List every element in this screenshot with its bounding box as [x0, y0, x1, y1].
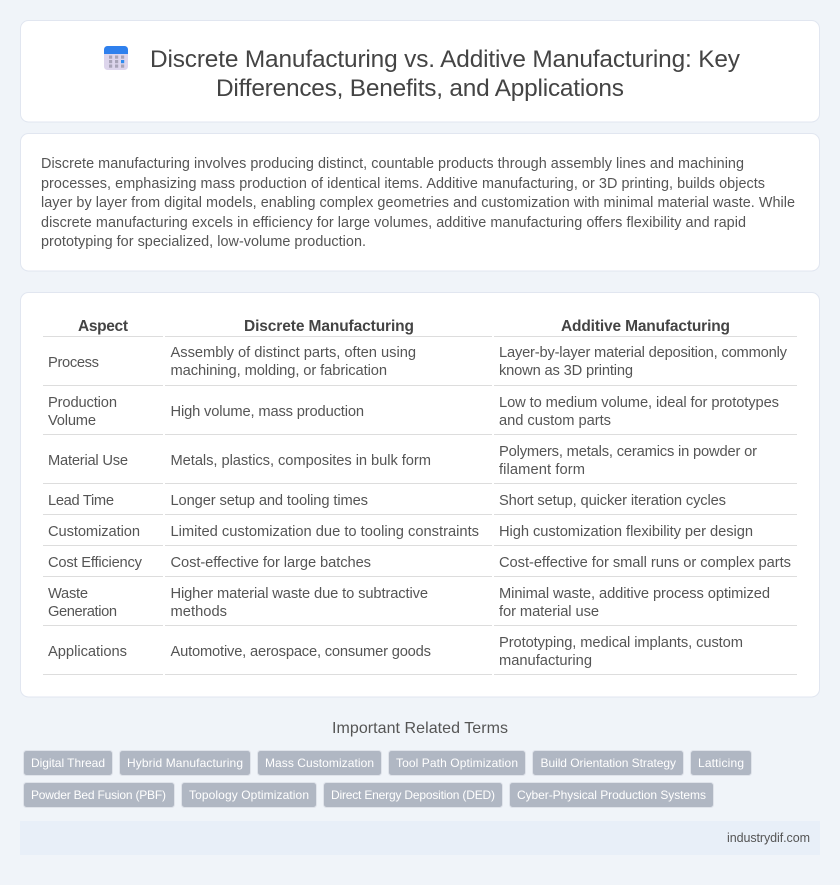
table row: material use: Polymers, metals, ceramics in powder or — [499, 444, 757, 460]
table header row: Aspect — [78, 318, 128, 335]
tag: hybrid manufacturing — [120, 750, 250, 776]
tag: mass customization: Mass Customization — [265, 756, 374, 770]
table row: cost efficiency: Cost-effective for small runs or complex parts — [499, 555, 791, 571]
table row: material use: Material Use — [48, 453, 128, 469]
table row: waste generation: Higher material waste due to subtractive — [170, 586, 428, 602]
table row: process: Process — [48, 355, 99, 371]
tag: powder bed fusion: Powder Bed Fusion (PBF) — [31, 788, 166, 802]
text block: introduction paragraph: prototyping for specialized, low-volume production. — [41, 234, 366, 250]
tag: digital thread — [24, 750, 112, 776]
table row: material use: filament form — [499, 462, 585, 478]
table row: material use — [43, 444, 797, 484]
tag: powder bed fusion — [24, 782, 174, 808]
panel: related term tags — [24, 750, 752, 808]
footer — [20, 821, 820, 855]
tag: mass customization — [258, 750, 382, 776]
table row: process: known as 3D printing — [499, 363, 633, 379]
table row: cost efficiency: Cost-effective for large batches — [170, 555, 371, 571]
text block: introduction paragraph: processes, emphasizing mass production of identical items. Additive manufacturing, or 3D printing, builds objects — [41, 176, 765, 192]
table row: cost efficiency: Cost Efficiency — [48, 555, 143, 571]
table row: applications: manufacturing — [499, 653, 592, 669]
tag: cyber-physical production systems — [510, 782, 714, 808]
table header row: Discrete Manufacturing — [244, 318, 414, 335]
table row: process — [43, 345, 797, 386]
panel: introduction — [20, 134, 820, 271]
text block: introduction paragraph: Discrete manufacturing involves producing distinct, countable products through assembly lines and machining — [41, 156, 744, 172]
table row: waste generation: Generation — [48, 604, 117, 620]
table row: applications: Applications — [48, 644, 127, 660]
text block: introduction paragraph — [41, 156, 795, 250]
table row: production volume: High volume, mass production — [170, 404, 364, 420]
table row: waste generation: methods — [170, 604, 227, 620]
tag: topology optimization: Topology Optimization — [189, 788, 309, 802]
tag: topology optimization — [182, 782, 316, 808]
tag: digital thread: Digital Thread — [31, 756, 105, 770]
table row: customization: Customization — [48, 524, 140, 540]
tag: build orientation strategy — [532, 750, 684, 776]
text block: introduction paragraph: layer by layer from digital models, enabling complex geometries and customization with minimal material waste. While — [41, 195, 795, 211]
table header row: Additive Manufacturing — [561, 318, 730, 335]
table row: applications: Prototyping, medical implants, custom — [499, 635, 743, 651]
table row: material use: Metals, plastics, composites in bulk form — [170, 453, 431, 469]
text block: introduction paragraph: discrete manufacturing excels in efficiency for large volumes, additive manufacturing offers flexibility and rapid — [41, 215, 746, 231]
title: Differences, Benefits, and Applications — [216, 75, 624, 102]
panel: title header — [20, 20, 820, 122]
table row: lead time: Lead Time — [48, 493, 114, 509]
title: Discrete Manufacturing vs. Additive Manufacturing: Key — [150, 46, 741, 73]
tag: latticing: Latticing — [698, 756, 744, 770]
table row: waste generation: Minimal waste, additive process optimized — [499, 586, 770, 602]
icon: calendar — [104, 46, 128, 70]
table row: process: Assembly of distinct parts, often using — [170, 345, 416, 361]
tag: direct energy deposition — [324, 782, 502, 808]
table row: customization: High customization flexibility per design — [499, 524, 753, 540]
tag: cyber-physical production systems: Cyber-Physical Production Systems — [517, 788, 706, 802]
table header row — [43, 318, 797, 336]
table row: lead time: Short setup, quicker iteration cycles — [499, 493, 726, 509]
title — [150, 46, 741, 102]
table row: production volume — [43, 395, 797, 434]
heading: important related terms: Important Related Terms — [332, 720, 508, 737]
table row: waste generation: for material use — [499, 604, 599, 620]
footer: industrydif.com — [727, 831, 810, 845]
panel: comparison table — [20, 292, 820, 697]
table row: waste generation — [43, 586, 797, 626]
tag: direct energy deposition: Direct Energy Deposition (DED) — [331, 788, 495, 802]
table row: applications — [43, 635, 797, 674]
table row: customization: Limited customization due to tooling constraints — [170, 524, 479, 540]
table row: customization — [43, 524, 797, 546]
table row: production volume: and custom parts — [499, 413, 611, 429]
tag: hybrid manufacturing: Hybrid Manufacturing — [127, 756, 243, 770]
table row: cost efficiency — [43, 555, 797, 576]
table row: process: Layer-by-layer material deposition, commonly — [499, 345, 788, 361]
tag: tool path optimization — [388, 750, 526, 776]
table row: lead time: Longer setup and tooling times — [170, 493, 368, 509]
table row: production volume: Low to medium volume, ideal for prototypes — [499, 395, 779, 411]
table row: applications: Automotive, aerospace, consumer goods — [170, 644, 431, 660]
table row: process: machining, molding, or fabrication — [170, 363, 387, 379]
tag: latticing — [690, 750, 752, 776]
tag: tool path optimization: Tool Path Optimization — [396, 756, 518, 770]
table row: waste generation: Waste — [48, 586, 88, 602]
tag: build orientation strategy: Build Orientation Strategy — [540, 756, 676, 770]
table row: lead time — [43, 493, 797, 514]
table row: production volume: Volume — [48, 413, 96, 429]
table row: production volume: Production — [48, 395, 117, 411]
